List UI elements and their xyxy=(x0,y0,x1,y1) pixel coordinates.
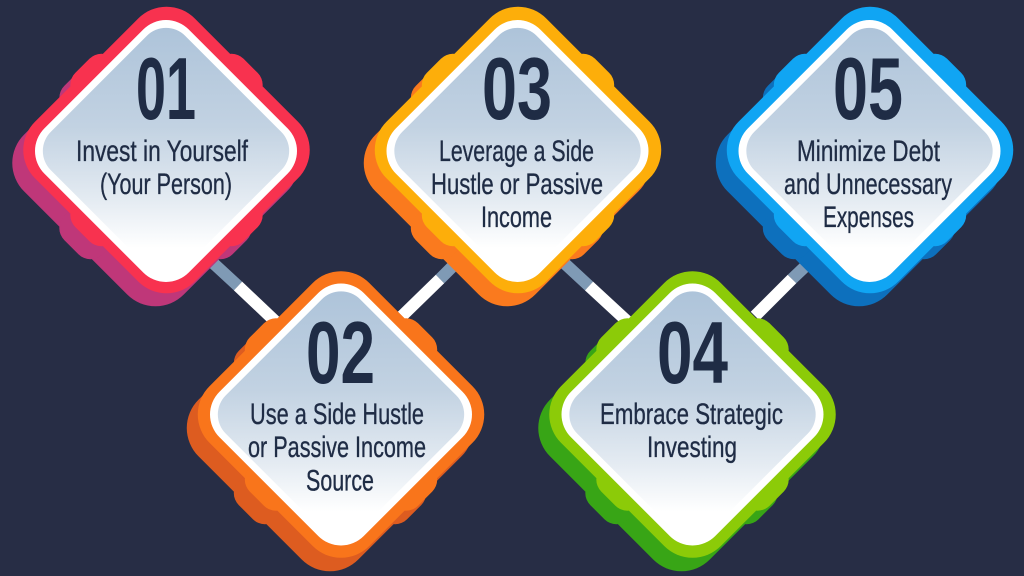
node 05 coloured frame xyxy=(702,0,1024,318)
connector: 04 to 05 xyxy=(755,261,811,316)
connector: 02 to 03 xyxy=(402,261,458,316)
node 02 label: or Passive Income xyxy=(248,431,426,464)
node 04 label: Investing xyxy=(647,431,737,464)
node 02 shadow shape xyxy=(162,260,498,576)
node 04 plate xyxy=(548,270,837,559)
node 01 coloured frame xyxy=(0,0,335,318)
node 03 xyxy=(339,0,686,331)
node 02 xyxy=(162,246,509,576)
node 05 number: 05 xyxy=(833,39,903,138)
node 03 label: Leverage a Side xyxy=(439,135,594,168)
node 02 coloured frame xyxy=(173,246,509,576)
node 03 label: Hustle or Passive xyxy=(431,168,603,201)
node 01 plate xyxy=(22,7,310,295)
node 03 number: 03 xyxy=(482,39,552,138)
node 05 label: Expenses xyxy=(823,201,914,234)
node 03 label xyxy=(431,135,603,234)
node 05 label: Minimize Debt xyxy=(797,135,940,168)
node 01 number: 01 xyxy=(136,39,196,138)
node 03 label: Income xyxy=(481,201,552,234)
node 04 label xyxy=(600,398,783,464)
node 05 label: and Unnecessary xyxy=(784,168,952,201)
node 01 xyxy=(0,0,335,331)
node 05 shadow shape xyxy=(691,0,1024,331)
node 01 label: (Your Person) xyxy=(100,168,232,201)
node 04 shadow shape xyxy=(513,260,850,576)
node 01 shadow shape xyxy=(0,0,324,331)
node 04 xyxy=(513,246,861,576)
node 05 xyxy=(691,0,1024,331)
node 01 label: Invest in Yourself xyxy=(76,135,248,168)
node 02 label: Source xyxy=(306,464,374,498)
node 03 plate xyxy=(373,7,662,295)
node 04 coloured frame xyxy=(524,246,861,576)
node 03 shadow shape xyxy=(339,0,675,331)
node 04 number: 04 xyxy=(657,303,728,402)
node 02 number: 02 xyxy=(306,303,375,402)
node 02 plate xyxy=(197,270,485,559)
connector: 01 to 02 xyxy=(212,262,276,322)
node 03 coloured frame xyxy=(350,0,686,318)
node 04 label: Embrace Strategic xyxy=(600,398,783,431)
node 02 label xyxy=(248,398,426,498)
node 02 label: Use a Side Hustle xyxy=(250,398,424,431)
node 05 label xyxy=(784,135,952,234)
connector: 03 to 04 xyxy=(562,261,628,322)
node 01 label xyxy=(76,135,248,201)
node 05 plate xyxy=(725,7,1014,295)
